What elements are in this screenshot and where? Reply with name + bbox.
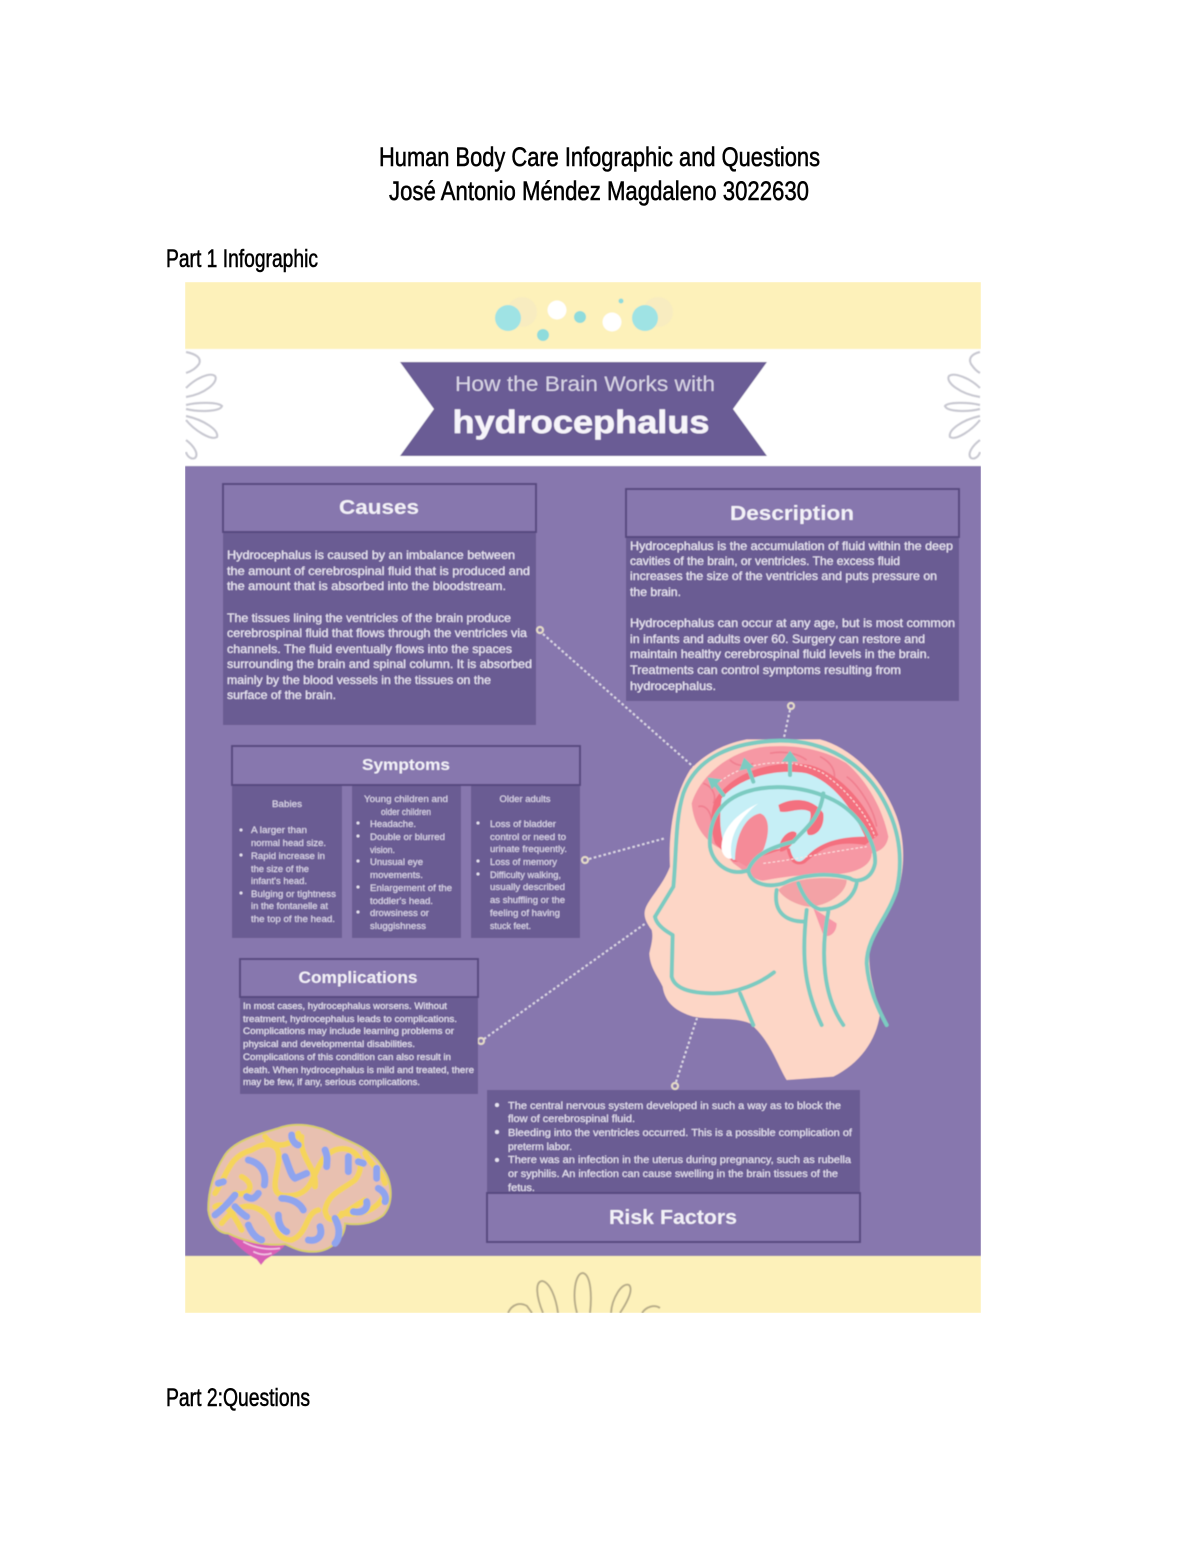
panel: complications: physical and developmental disabilities. <box>243 1039 415 1050</box>
infographic panel <box>185 282 981 1313</box>
connector: complications <box>478 923 646 1044</box>
symptoms column: young children: Young children and <box>364 794 448 805</box>
symptoms heading <box>232 746 580 785</box>
cerebellum and brainstem <box>778 878 847 907</box>
panel: complications: death. When hydrocephalus is mild and treated, there <box>243 1065 474 1076</box>
panel: causes: The tissues lining the ventricles of the brain produce <box>227 611 511 625</box>
symptoms column: young children: toddler's head. <box>370 896 433 907</box>
symptoms column: babies: Rapid increase in <box>251 851 325 862</box>
symptoms column: older adults: Difficulty walking, <box>490 870 561 881</box>
ventricle rim <box>711 764 878 865</box>
inner brain structures <box>735 813 768 867</box>
panel: causes: mainly by the blood vessels in the tissues on the <box>227 673 491 687</box>
fluid pathways <box>655 741 900 1025</box>
symptoms column: young children: drowsiness or <box>370 908 429 919</box>
document title: Human Body Care Infographic and Questions <box>379 142 820 172</box>
panel: description: Hydrocephalus can occur at any age, but is most common <box>630 616 955 630</box>
panel: risk factors: or syphilis. An infection can cause swelling in the brain tissues of the <box>508 1169 838 1180</box>
panel: complications: Complications may include learning problems or <box>243 1026 455 1037</box>
panel: description: increases the size of the ventricles and puts pressure on <box>630 569 937 583</box>
panel: causes: surrounding the brain and spinal column. It is absorbed <box>227 657 532 671</box>
panel: causes: cerebrospinal fluid that flows through the ventricles via <box>227 626 527 640</box>
symptoms column: young children: Enlargement of the <box>370 883 452 894</box>
title banner: How the Brain Works with <box>455 373 715 396</box>
ventricle fluid <box>720 772 865 861</box>
panel: complications: may be few, if any, serious complications. <box>243 1077 420 1088</box>
symptoms column: older adults <box>471 786 580 938</box>
symptoms column: babies: Babies <box>272 799 302 810</box>
panel: complications <box>240 959 478 1094</box>
title banner <box>400 362 767 456</box>
left petal decoration <box>186 352 222 459</box>
symptoms column: young children: sluggishness <box>370 921 426 932</box>
document title: José Antonio Méndez Magdaleno 3022630 <box>389 176 809 206</box>
illustration: head with brain <box>645 739 903 1080</box>
symptoms column: young children: older children <box>381 807 431 818</box>
symptoms column: young children: Unusual eye <box>370 857 423 868</box>
symptoms column: young children: vision. <box>370 845 395 856</box>
document title <box>379 142 820 206</box>
symptoms column: young children <box>352 786 461 938</box>
panel: description <box>626 489 959 701</box>
connector: description <box>783 703 794 742</box>
symptoms column: babies: A larger than <box>251 825 307 836</box>
panel: description: Treatments can control symptoms resulting from <box>630 663 901 677</box>
panel: causes: channels. The fluid eventually flows into the spaces <box>227 642 512 656</box>
panel: causes: the amount of cerebrospinal fluid that is produced and <box>227 564 530 578</box>
brain folds <box>698 752 877 830</box>
panel: risk factors <box>487 1090 860 1242</box>
panel: complications: Complications of this condition can also result in <box>243 1052 451 1063</box>
symptoms column: older adults: control or need to <box>490 832 566 843</box>
panel: risk factors: Risk Factors <box>609 1207 737 1229</box>
symptoms column: young children: Double or blurred <box>370 832 445 843</box>
brain tissue <box>692 746 888 881</box>
connector: symptoms <box>582 838 666 863</box>
panel: risk factors: Bleeding into the ventricles occurred. This is a possible complication of <box>508 1128 852 1139</box>
right petal decoration <box>945 352 980 459</box>
panel: complications: treatment, hydrocephalus leads to complications. <box>243 1014 457 1025</box>
heading: part 2: Part 2:Questions <box>166 1384 310 1412</box>
panel: description: the brain. <box>630 585 681 599</box>
symptoms heading: Symptoms <box>362 757 450 774</box>
panel: risk factors: fetus. <box>508 1183 535 1194</box>
panel: risk factors: The central nervous system developed in such a way as to block the <box>508 1101 841 1112</box>
panel: causes: Causes <box>339 497 419 519</box>
symptoms column: babies: the size of the <box>251 864 309 875</box>
symptoms column: babies: normal head size. <box>251 838 326 849</box>
symptoms column: older adults: Loss of memory <box>490 857 557 868</box>
symptoms column: older adults: stuck feet. <box>490 921 531 932</box>
panel: symptoms <box>232 746 580 938</box>
symptoms column: babies: in the fontanelle at <box>251 901 328 912</box>
panel: causes: Hydrocephalus is caused by an imbalance between <box>227 548 515 562</box>
symptoms column: older adults: urinate frequently. <box>490 844 567 855</box>
purple main area <box>185 466 981 1256</box>
dashed folds <box>720 763 875 863</box>
panel: description: cavities of the brain, or ventricles. The excess fluid <box>630 554 900 568</box>
symptoms column: babies <box>232 786 342 938</box>
symptoms column: young children: movements. <box>370 870 423 881</box>
panel: description: hydrocephalus. <box>630 679 716 693</box>
panel: causes: the amount that is absorbed into the bloodstream. <box>227 579 506 593</box>
symptoms column: babies: Bulging or tightness <box>251 889 336 900</box>
panel: risk factors: preterm labor. <box>508 1142 572 1153</box>
head silhouette <box>645 739 903 1080</box>
panel: description: Hydrocephalus is the accumulation of fluid within the deep <box>630 539 953 553</box>
panel: causes: surface of the brain. <box>227 688 336 702</box>
panel: description: maintain healthy cerebrospinal fluid levels in the brain. <box>630 647 930 661</box>
symptoms column: babies: the top of the head. <box>251 914 335 925</box>
illustration: small brain <box>208 1125 391 1265</box>
symptoms column: young children: Headache. <box>370 819 416 830</box>
panel: description: in infants and adults over 60. Surgery can restore and <box>630 632 925 646</box>
symptoms column: older adults: as shuffling or the <box>490 895 565 906</box>
arrow heads <box>707 751 798 789</box>
panel: complications: In most cases, hydrocephalus worsens. Without <box>243 1001 447 1012</box>
panel: risk factors: There was an infection in the uterus during pregnancy, such as rubella <box>508 1155 851 1166</box>
heading: part 1: Part 1 Infographic <box>166 245 318 273</box>
connector: causes <box>537 627 697 770</box>
symptoms column: older adults: feeling of having <box>490 908 560 919</box>
bottom yellow band with petals <box>185 1256 981 1313</box>
title banner: hydrocephalus <box>452 404 710 440</box>
symptoms column: older adults: Loss of bladder <box>490 819 556 830</box>
connector: risk factors <box>672 1018 697 1089</box>
top yellow band with bubbles <box>185 282 981 349</box>
symptoms column: older adults: usually described <box>490 882 565 893</box>
highlight <box>722 803 758 859</box>
panel: description: Description <box>730 503 854 525</box>
symptoms column: older adults: Older adults <box>500 794 551 805</box>
symptoms column: babies: infant's head. <box>251 876 307 887</box>
panel: causes <box>223 484 536 725</box>
panel: risk factors: flow of cerebrospinal fluid. <box>508 1114 635 1125</box>
panel: complications: Complications <box>298 968 418 987</box>
